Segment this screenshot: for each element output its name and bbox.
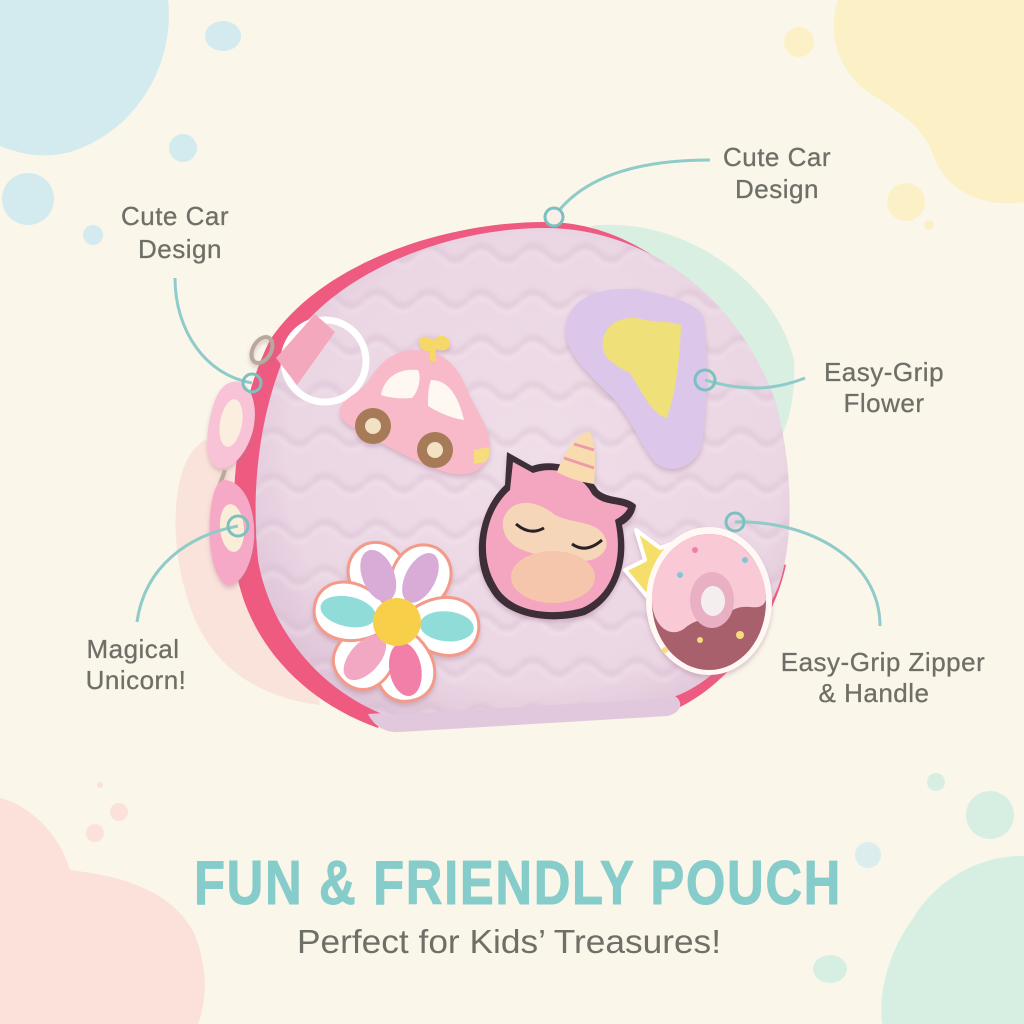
unicorn mask bbox=[503, 503, 607, 561]
handle ring bbox=[284, 320, 366, 402]
title: FUN & FRIENDLY POUCH bbox=[194, 849, 842, 918]
pouch base flap bbox=[368, 694, 680, 732]
product: pouch bbox=[207, 220, 800, 732]
callout: Cute Car Design top right bbox=[545, 142, 831, 226]
pouch pink zipper edge bbox=[234, 222, 786, 728]
unicorn outline bbox=[479, 452, 636, 619]
zipper pull charm bottom bbox=[210, 470, 254, 585]
callout: Cute Car Design top right: Cute Car bbox=[723, 142, 831, 172]
flower badge bbox=[309, 533, 481, 706]
donut bbox=[646, 527, 772, 675]
callout: Magical Unicorn: Magical bbox=[86, 634, 180, 664]
crown and donut badge bbox=[625, 527, 772, 675]
handle strap bbox=[276, 314, 335, 385]
quilted texture bbox=[256, 244, 790, 715]
callout: Cute Car Design left bbox=[121, 201, 261, 392]
subtitle: Perfect for Kids’ Treasures! bbox=[297, 923, 721, 960]
callout: Easy-Grip Flower: Easy-Grip bbox=[824, 357, 944, 387]
callout: Easy-Grip Zipper and Handle: & Handle bbox=[819, 678, 929, 708]
callout: Easy-Grip Zipper and Handle: Easy-Grip Zipper bbox=[781, 647, 985, 677]
callout: Magical Unicorn bbox=[86, 516, 248, 695]
pouch shell bbox=[256, 228, 790, 715]
crown bbox=[625, 530, 685, 625]
callout: Easy-Grip Flower: Flower bbox=[843, 388, 925, 418]
zipper pull charm top bbox=[207, 333, 277, 468]
unicorn snout bbox=[511, 551, 595, 603]
callout: Cute Car Design top right: Design bbox=[735, 174, 819, 204]
unicorn badge bbox=[479, 432, 636, 619]
callout: Easy-Grip Zipper and Handle bbox=[726, 513, 985, 708]
car badge bbox=[340, 336, 490, 474]
unicorn face bbox=[486, 462, 628, 612]
callout: Magical Unicorn: Unicorn! bbox=[86, 665, 186, 695]
unicorn horn bbox=[557, 432, 595, 484]
callout: Cute Car Design left: Design bbox=[138, 234, 222, 264]
heart badge bbox=[566, 289, 707, 469]
callout: Cute Car Design left: Cute Car bbox=[121, 201, 229, 231]
callout: Easy-Grip Flower bbox=[695, 357, 944, 418]
